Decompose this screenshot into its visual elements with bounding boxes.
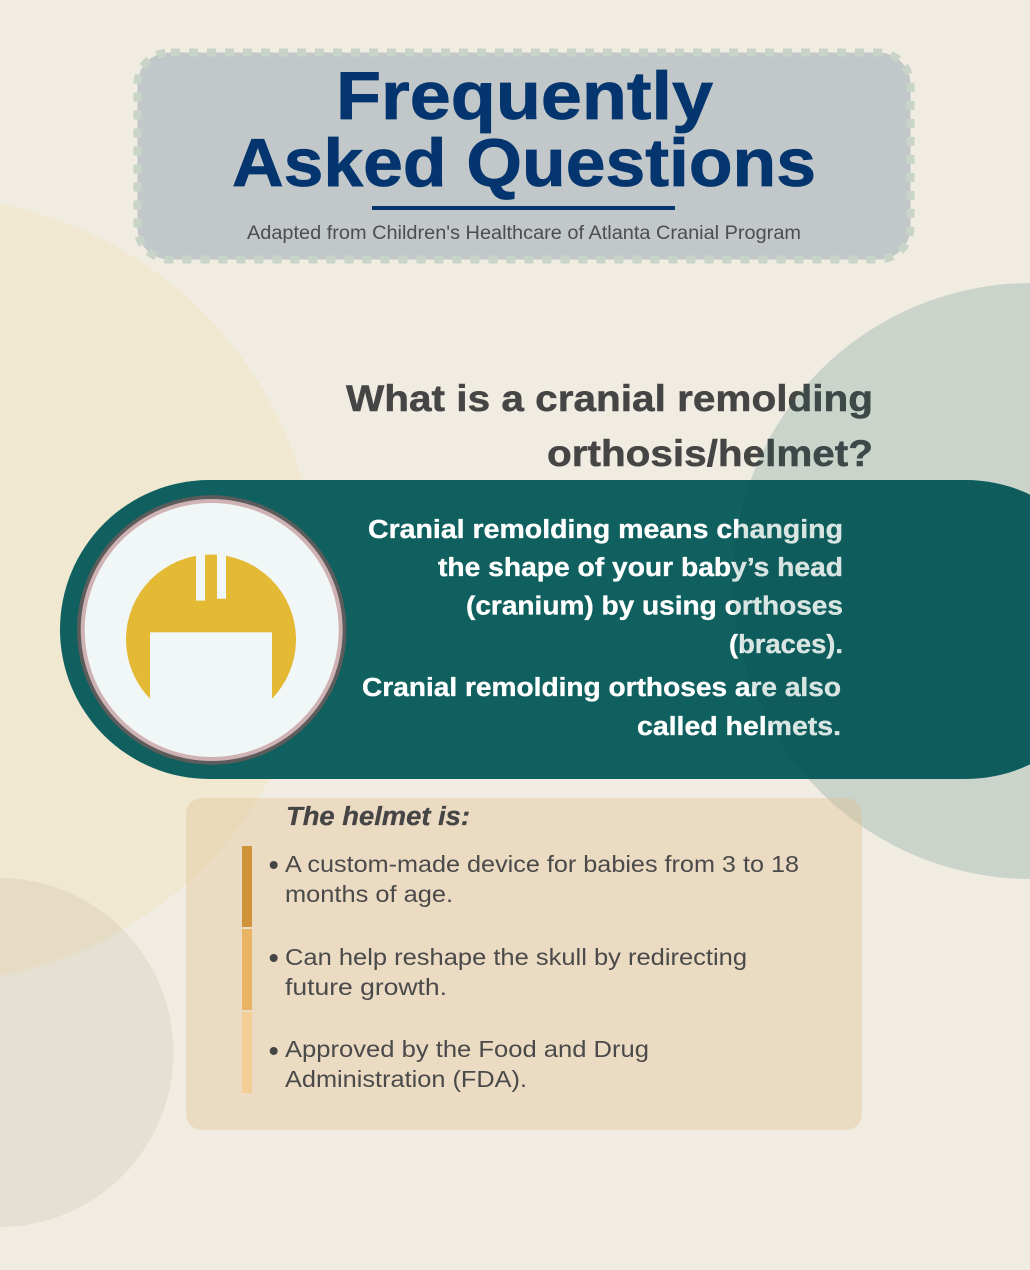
fact 2: [242, 929, 747, 1010]
title box: [138, 52, 910, 260]
question heading: What is a cranial remolding: [346, 377, 873, 419]
definition text: Cranial remolding orthoses are also: [362, 674, 841, 702]
fact 2: Can help reshape the skull by redirecting: [285, 944, 747, 970]
fact 1: months of age.: [285, 881, 453, 907]
definition text: [362, 516, 843, 741]
icon ring: [77, 495, 346, 765]
panel: title: [138, 52, 910, 260]
fact 3: Administration (FDA).: [285, 1066, 527, 1092]
title: Frequently: [336, 58, 713, 134]
background circle: yellow: [0, 197, 318, 983]
teal pill: [60, 480, 1030, 779]
title underline: [372, 206, 675, 210]
definition text: (cranium) by using orthoses: [466, 592, 843, 620]
panel: helmet facts: [186, 798, 862, 1130]
facts heading: The helmet is:: [286, 803, 470, 831]
question heading: orthosis/helmet?: [547, 432, 873, 474]
definition text: the shape of your baby’s head: [438, 554, 843, 582]
background circle: tan: [0, 878, 174, 1227]
title: [232, 58, 816, 201]
fact 3: [242, 1012, 649, 1093]
definition text: Cranial remolding means changing: [368, 516, 843, 544]
definition text: (braces).: [729, 631, 843, 659]
title: Asked Questions: [232, 125, 816, 201]
background circle: green: [733, 283, 1030, 879]
fact 2: future growth.: [285, 974, 447, 1000]
facts box: [186, 798, 862, 1130]
definition text: called helmets.: [637, 713, 841, 741]
panel: definition band: [60, 480, 1030, 779]
source line: Adapted from Children's Healthcare of Atlanta Cranial Program: [247, 223, 801, 244]
icon: helmet: [77, 495, 346, 765]
fact 3: Approved by the Food and Drug: [285, 1036, 649, 1062]
fact 1: [242, 846, 799, 927]
question heading: [346, 377, 873, 474]
fact 1: A custom-made device for babies from 3 to 18: [285, 851, 799, 877]
helmet shape: [126, 554, 296, 724]
